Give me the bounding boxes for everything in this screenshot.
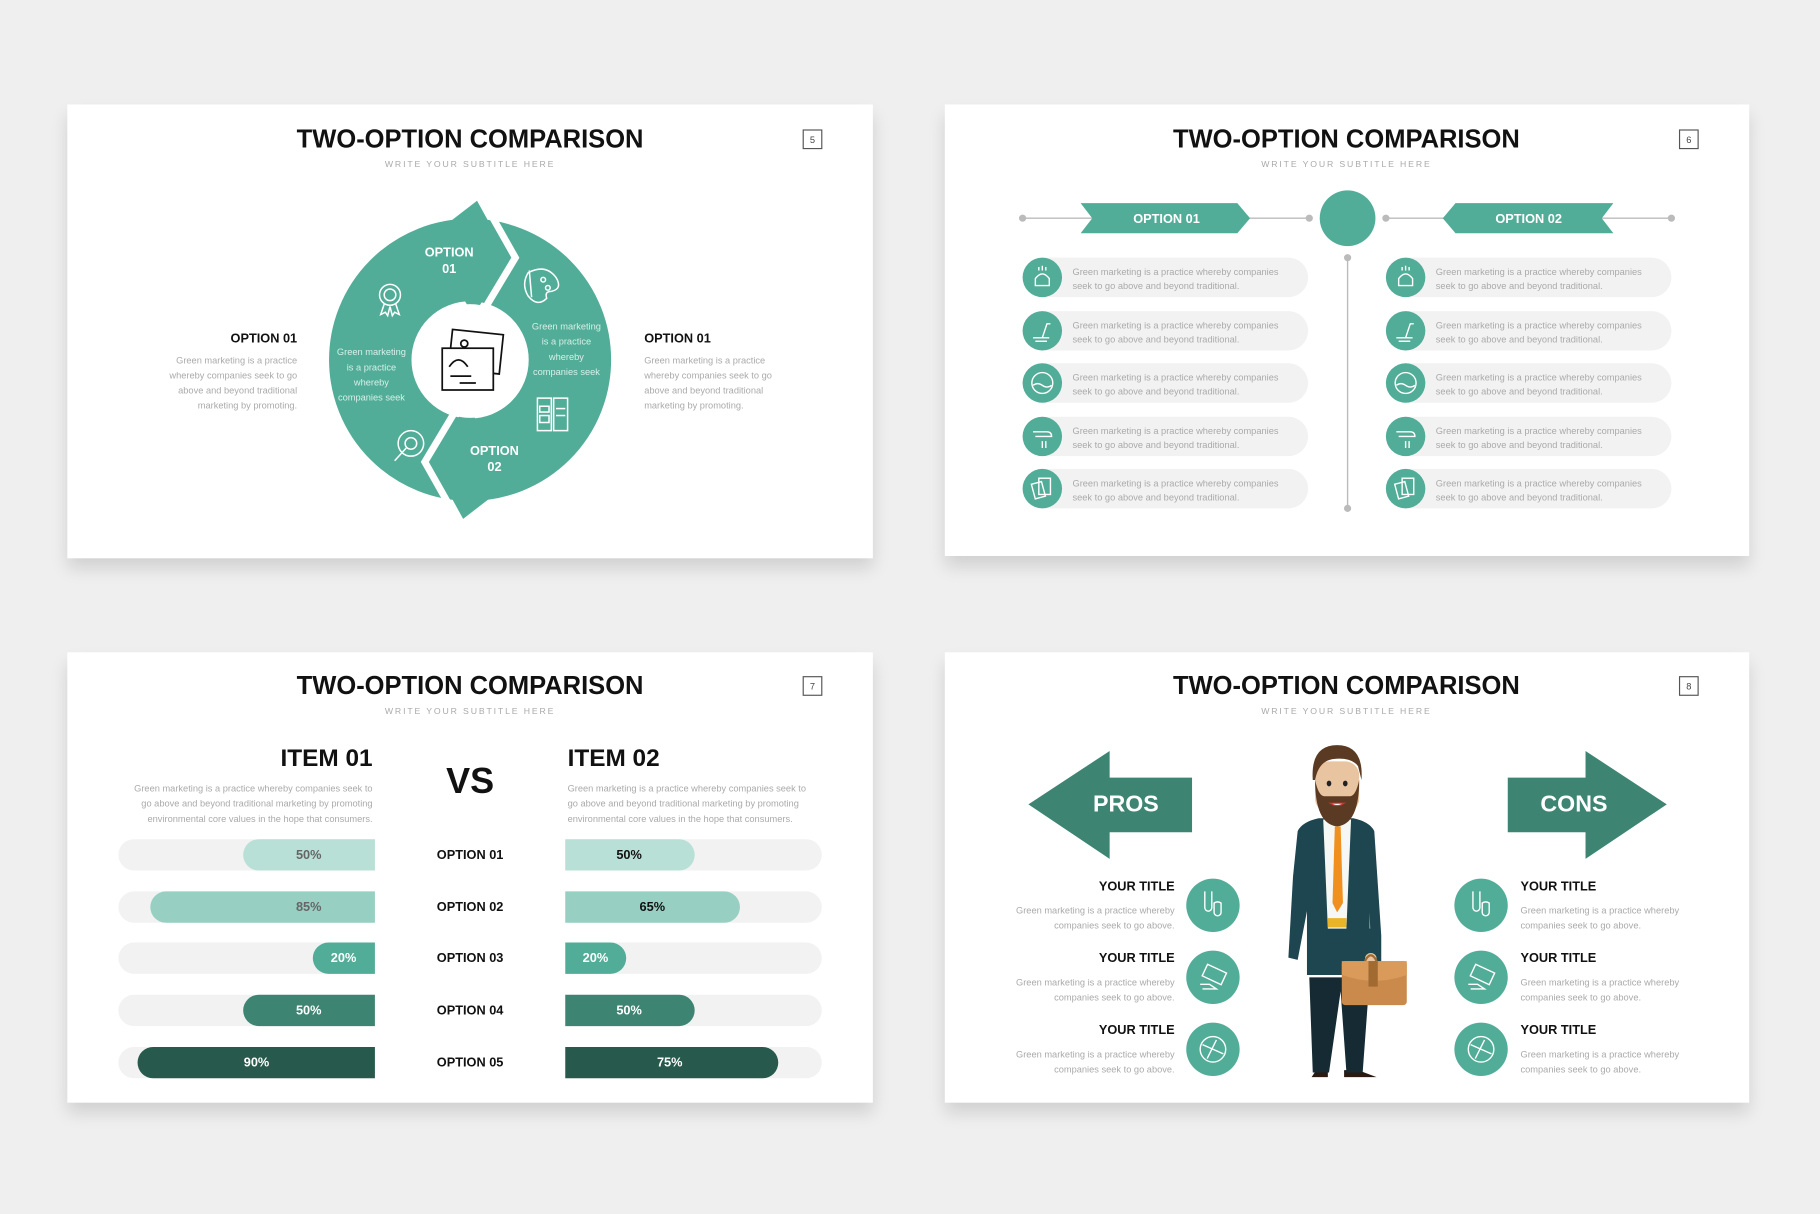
list: option 01 items: seek to go above and beyond traditional.	[1072, 440, 1239, 450]
page number: 8	[1686, 681, 1691, 691]
panel: bar comparison	[67, 652, 873, 1103]
heading: item 02: environmental core values in the hope that consumers.	[568, 814, 793, 824]
list: option 02 items: Green marketing is a practice whereby companies	[1436, 373, 1642, 383]
page number	[1680, 130, 1698, 149]
text in ring left: is a practice	[347, 362, 396, 372]
text block: option 01 right: OPTION 01	[644, 330, 711, 345]
list: option 02 items: seek to go above and beyond traditional.	[1436, 387, 1603, 397]
text block: option 01 left: whereby companies seek to go	[168, 370, 297, 380]
page number	[803, 130, 822, 149]
center circle	[1320, 190, 1375, 246]
text in ring right: companies seek	[533, 367, 600, 377]
bar chart: item 02: 20%	[583, 950, 608, 965]
title: TWO-OPTION COMPARISON	[297, 672, 643, 700]
panel: option lists	[945, 104, 1749, 556]
text block: option 01 right: above and beyond traditional	[644, 385, 763, 395]
list: option 02 items: Green marketing is a practice whereby companies	[1436, 426, 1642, 436]
arrow: pros	[1028, 751, 1192, 859]
pros items: Green marketing is a practice whereby	[1016, 1049, 1175, 1059]
bar chart: item 01: 50%	[296, 847, 322, 862]
text block: option 01 right: Green marketing is a practice	[644, 355, 765, 365]
bar chart: item 02: 50%	[616, 847, 642, 862]
list: option 02 items: Green marketing is a practice whereby companies	[1436, 320, 1642, 330]
text block: option 01 right: whereby companies seek to go	[643, 370, 772, 380]
heading: item 02	[568, 745, 806, 824]
page number: 7	[810, 681, 815, 691]
arrow: cons: CONS	[1540, 790, 1607, 816]
icon: palette	[525, 269, 559, 302]
heading: item 02: Green marketing is a practice whereby companies seek to	[568, 784, 806, 794]
heading: item 01: go above and beyond traditional marketing by promoting	[141, 799, 373, 809]
title	[1173, 125, 1520, 169]
pros items: YOUR TITLE	[1099, 950, 1175, 965]
title	[1173, 672, 1520, 716]
page number: 5	[810, 135, 815, 145]
bar chart: item 01: 50%	[296, 1002, 322, 1017]
icon: award	[380, 284, 400, 316]
ribbon: option 01: OPTION 01	[1133, 211, 1200, 226]
cons items: companies seek to go above.	[1521, 921, 1641, 931]
text block: option 01 left: marketing by promoting.	[198, 401, 297, 411]
bar chart: item 02: 50%	[616, 1002, 642, 1017]
option labels	[437, 847, 504, 1070]
pros items: companies seek to go above.	[1054, 1064, 1175, 1074]
header connectors	[1020, 215, 1674, 511]
bar chart: item 02	[542, 836, 822, 1082]
pros items: Green marketing is a practice whereby	[1016, 905, 1175, 915]
list: option 01 items: Green marketing is a practice whereby companies	[1072, 478, 1279, 488]
cons items: Green marketing is a practice whereby	[1521, 1049, 1680, 1059]
title: TWO-OPTION COMPARISON	[1173, 125, 1520, 153]
text in ring left: whereby	[353, 377, 389, 387]
page number	[803, 677, 822, 695]
text in ring left: Green marketing	[337, 347, 406, 357]
label: option 01 in ring: OPTION	[425, 245, 474, 260]
icon: app screens	[537, 398, 568, 431]
ribbon: option 02	[1443, 203, 1613, 233]
arrow: cons	[1508, 751, 1667, 859]
list: option 01 items: Green marketing is a practice whereby companies	[1072, 373, 1279, 383]
heading: item 01: Green marketing is a practice whereby companies seek to	[134, 784, 373, 794]
title: TWO-OPTION COMPARISON	[297, 125, 643, 153]
option labels: OPTION 02	[437, 899, 503, 914]
label: option 01 in ring	[425, 245, 474, 276]
text in ring left: companies seek	[338, 392, 405, 402]
ribbon: option 02: OPTION 02	[1495, 211, 1562, 226]
bar chart: item 02: 65%	[640, 899, 665, 914]
pros items: companies seek to go above.	[1054, 921, 1175, 931]
cons items: YOUR TITLE	[1521, 878, 1596, 893]
title: WRITE YOUR SUBTITLE HERE	[1261, 159, 1432, 169]
icon: pictures center	[442, 329, 503, 390]
option labels: OPTION 05	[437, 1055, 503, 1070]
text in ring left	[337, 347, 406, 402]
icon: target	[395, 431, 424, 461]
bar chart: item 02: 75%	[657, 1055, 682, 1070]
text block: option 01 right	[643, 330, 772, 411]
list: option 01 items: seek to go above and beyond traditional.	[1072, 334, 1239, 344]
list: option 01 items: Green marketing is a practice whereby companies	[1072, 267, 1279, 277]
label: option 02 in ring: OPTION	[470, 443, 519, 458]
list: option 01 items: seek to go above and beyond traditional.	[1072, 387, 1239, 397]
cons items: YOUR TITLE	[1521, 950, 1596, 965]
bar chart: item 01	[118, 836, 398, 1082]
option labels: OPTION 01	[437, 847, 503, 862]
cons items: companies seek to go above.	[1521, 993, 1641, 1003]
panel: circular cycle comparison	[67, 104, 873, 558]
text block: option 01 left: OPTION 01	[231, 330, 297, 345]
list: option 02 items: seek to go above and beyond traditional.	[1436, 492, 1603, 502]
ribbon: option 01	[1081, 203, 1250, 233]
page number: 6	[1686, 135, 1691, 145]
title: TWO-OPTION COMPARISON	[1173, 672, 1520, 700]
cons items: YOUR TITLE	[1521, 1022, 1596, 1037]
title: WRITE YOUR SUBTITLE HERE	[1261, 706, 1432, 716]
vs label: VS	[446, 760, 494, 801]
title	[297, 672, 643, 716]
list: option 02 items: seek to go above and beyond traditional.	[1436, 440, 1603, 450]
label: option 01 in ring: 01	[442, 261, 456, 276]
title	[297, 125, 643, 169]
option labels: OPTION 03	[437, 950, 503, 965]
text in ring right: Green marketing	[532, 322, 601, 332]
text in ring right: is a practice	[542, 337, 591, 347]
panel: pros and cons	[945, 652, 1749, 1103]
list: option 02 items: seek to go above and beyond traditional.	[1436, 281, 1603, 291]
pros items: companies seek to go above.	[1054, 993, 1175, 1003]
cons items: Green marketing is a practice whereby	[1521, 977, 1680, 987]
label: option 02 in ring	[470, 443, 519, 474]
list: option 01 items: Green marketing is a practice whereby companies	[1072, 320, 1279, 330]
pros items: YOUR TITLE	[1099, 1022, 1175, 1037]
list: option 01 items: seek to go above and beyond traditional.	[1072, 492, 1239, 502]
text in ring right	[532, 322, 601, 377]
title: WRITE YOUR SUBTITLE HERE	[385, 706, 555, 716]
heading: item 02: go above and beyond traditional marketing by promoting	[568, 799, 799, 809]
bar chart: item 01: 90%	[244, 1055, 269, 1070]
page number	[1680, 677, 1698, 695]
cycle diagram	[337, 201, 601, 519]
text block: option 01 left: Green marketing is a practice	[176, 355, 297, 365]
heading: item 01: ITEM 01	[281, 745, 373, 772]
text in ring right: whereby	[548, 352, 584, 362]
label: option 02 in ring: 02	[487, 459, 502, 474]
bar chart: item 01: 85%	[296, 899, 322, 914]
pros items	[1016, 878, 1240, 1076]
cons items	[1454, 878, 1680, 1076]
text block: option 01 left: above and beyond traditional	[178, 385, 297, 395]
pros items: Green marketing is a practice whereby	[1016, 977, 1175, 987]
heading: item 02: ITEM 02	[568, 745, 660, 772]
list: option 02 items: Green marketing is a practice whereby companies	[1436, 478, 1642, 488]
list: option 01 items: seek to go above and beyond traditional.	[1072, 281, 1239, 291]
cons items: companies seek to go above.	[1521, 1064, 1641, 1074]
heading: item 01: environmental core values in the hope that consumers.	[148, 814, 373, 824]
list: option 01 items	[1023, 258, 1308, 508]
text block: option 01 right: marketing by promoting.	[644, 401, 744, 411]
pros items: YOUR TITLE	[1099, 878, 1175, 893]
list: option 02 items: Green marketing is a practice whereby companies	[1436, 267, 1642, 277]
title: WRITE YOUR SUBTITLE HERE	[385, 159, 555, 169]
list: option 02 items	[1386, 258, 1671, 508]
arrow: pros: PROS	[1093, 790, 1159, 816]
option labels: OPTION 04	[437, 1002, 504, 1017]
list: option 02 items: seek to go above and beyond traditional.	[1436, 334, 1603, 344]
bar chart: item 01: 20%	[331, 950, 356, 965]
text block: option 01 left	[168, 330, 297, 411]
cons items: Green marketing is a practice whereby	[1521, 905, 1680, 915]
heading: item 01	[134, 745, 373, 824]
list: option 01 items: Green marketing is a practice whereby companies	[1072, 426, 1279, 436]
illustration: businessman	[1288, 745, 1407, 1077]
